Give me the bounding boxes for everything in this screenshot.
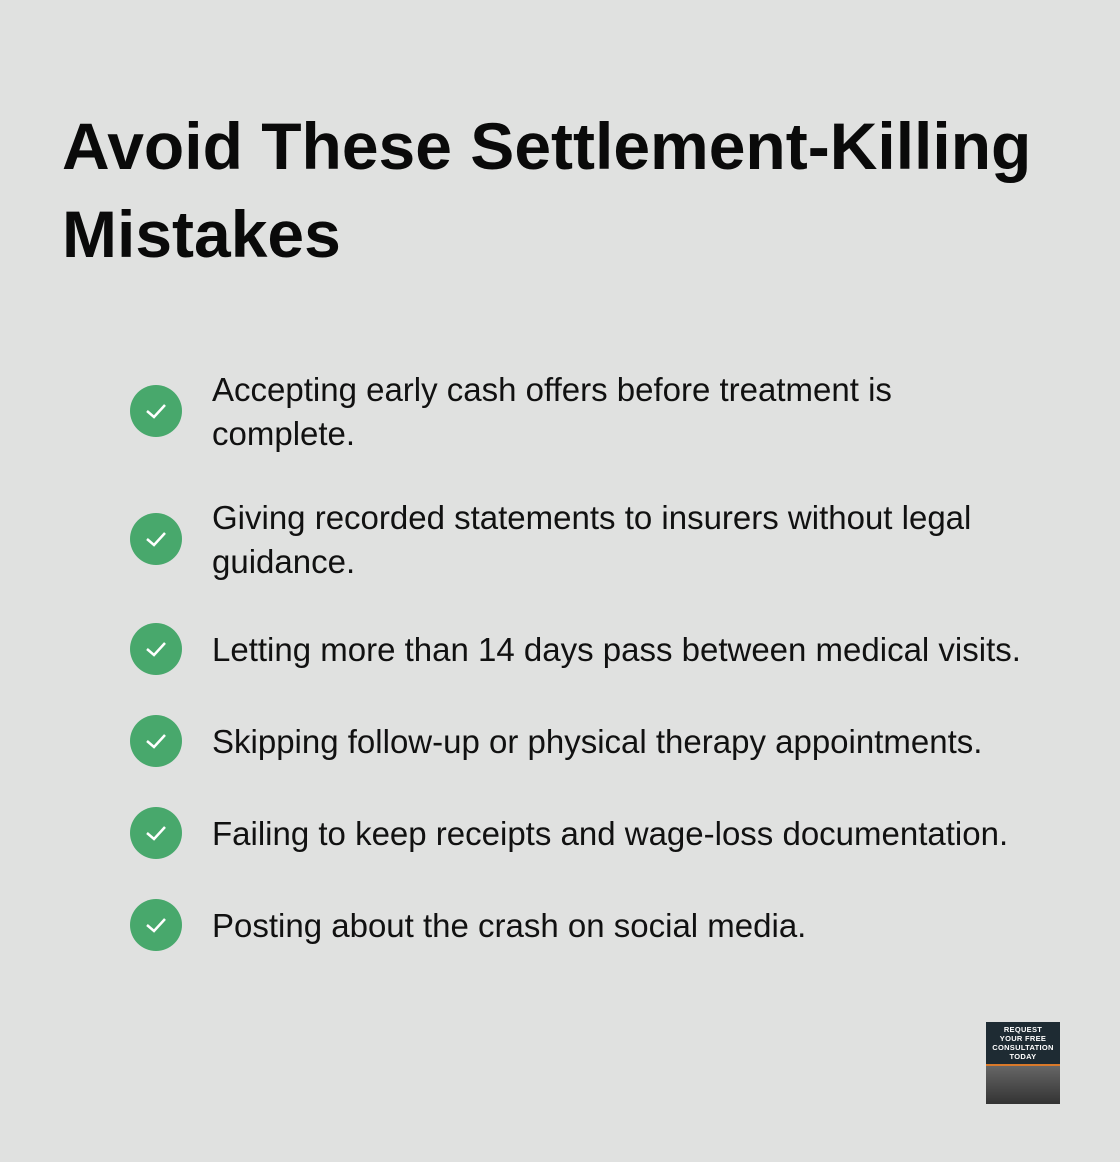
text 1: complete.	[212, 415, 355, 452]
logo badge: TODAY	[1010, 1052, 1036, 1061]
text 6: Posting about the crash on social media.	[212, 907, 806, 944]
logo badge: YOUR FREE	[1000, 1034, 1046, 1043]
title: Avoid These Settlement-Killing	[62, 109, 1031, 183]
text 1: Accepting early cash offers before treatment is	[212, 371, 892, 408]
item 4	[130, 715, 982, 767]
text 2	[212, 499, 971, 580]
text 2: Giving recorded statements to insurers without legal	[212, 499, 971, 536]
item 1	[130, 371, 892, 452]
item 3	[130, 623, 1021, 675]
icon: check	[130, 807, 182, 859]
logo badge: REQUEST	[1004, 1025, 1042, 1034]
icon: check	[130, 715, 182, 767]
text 3: Letting more than 14 days pass between medical visits.	[212, 631, 1021, 668]
text 2: guidance.	[212, 543, 355, 580]
icon: check	[130, 623, 182, 675]
text 1	[212, 371, 892, 452]
text 5: Failing to keep receipts and wage-loss documentation.	[212, 815, 1008, 852]
icon: check	[130, 899, 182, 951]
title: Mistakes	[62, 197, 341, 271]
icon: check	[130, 513, 182, 565]
text 4: Skipping follow-up or physical therapy appointments.	[212, 723, 982, 760]
item 6	[130, 899, 806, 951]
title	[62, 109, 1031, 271]
logo badge: CONSULTATION	[992, 1043, 1054, 1052]
icon: check	[130, 385, 182, 437]
item 5	[130, 807, 1008, 859]
logo badge	[986, 1022, 1060, 1102]
item 2	[130, 499, 971, 580]
